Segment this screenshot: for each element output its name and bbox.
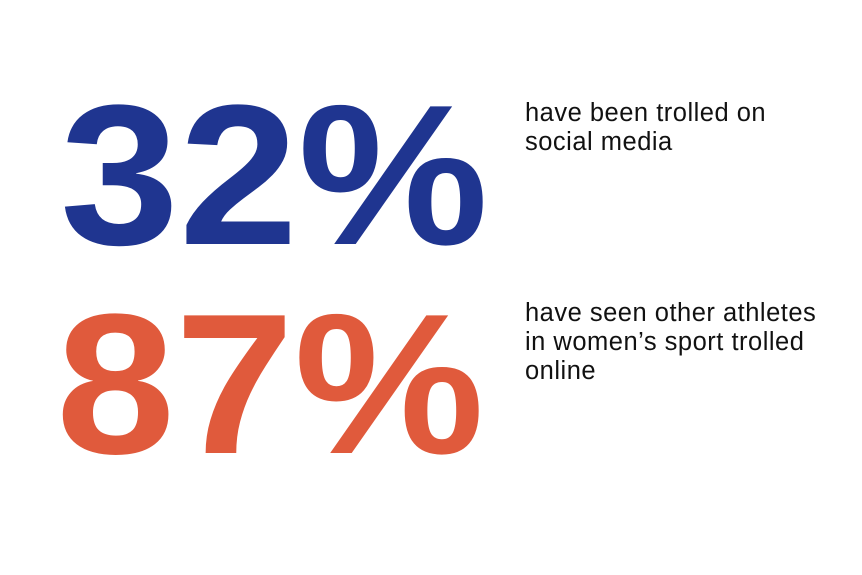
text: seen other athletes trolled: in women’s sport trolled <box>525 328 804 356</box>
text: trolled on social media: have been trolled on <box>525 99 766 127</box>
stat: 32%: 32% <box>60 64 488 287</box>
text: seen other athletes trolled <box>525 299 816 385</box>
text: trolled on social media <box>525 99 766 156</box>
text: seen other athletes trolled: online <box>525 357 596 385</box>
text: trolled on social media: social media <box>525 128 673 156</box>
stat: 87%: 87% <box>56 273 484 496</box>
text: seen other athletes trolled: have seen other athletes <box>525 299 816 327</box>
